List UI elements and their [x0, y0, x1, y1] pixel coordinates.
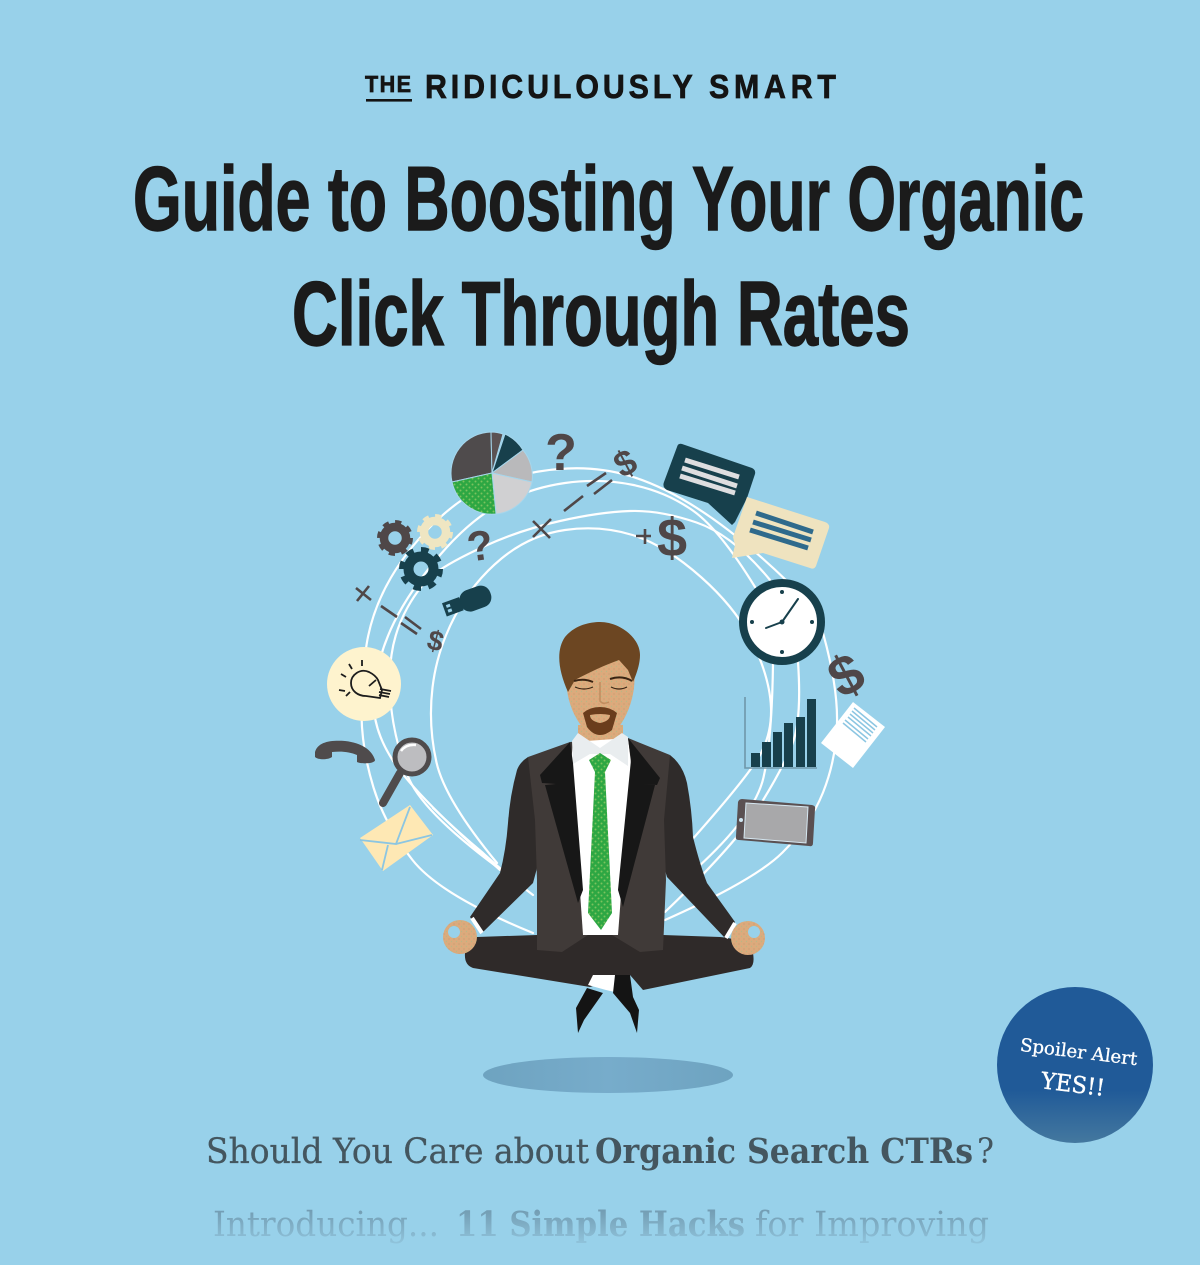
- speech bubble dark: [663, 444, 755, 525]
- collar: [572, 733, 628, 766]
- right lapel: [618, 738, 660, 907]
- fading intro line: [213, 1204, 989, 1245]
- lightbulb icon: [327, 647, 401, 721]
- phone icon: [315, 741, 375, 763]
- right shoe: [613, 975, 639, 1033]
- nose: [600, 682, 609, 703]
- left lapel: [540, 742, 583, 903]
- title: [133, 149, 1084, 365]
- subheading question: ?: [977, 1132, 994, 1172]
- dollar sign right: $: [817, 640, 874, 710]
- shirt: [571, 738, 631, 935]
- pie chart icon: [451, 432, 532, 514]
- jacket body: [528, 738, 670, 952]
- subheading question: Should You Care about: [206, 1132, 589, 1172]
- face: [564, 640, 636, 736]
- spoiler alert badge: Spoiler Alert: [1019, 1035, 1139, 1070]
- meditating man: [443, 622, 765, 1033]
- subheading question: [206, 1131, 994, 1172]
- header eyebrow: [365, 68, 837, 105]
- fading intro line: 11 Simple Hacks: [456, 1204, 745, 1245]
- left arm: [470, 757, 550, 933]
- orbit rings: [361, 468, 837, 933]
- sock: [588, 975, 615, 992]
- fading intro line: Introducing...: [213, 1205, 439, 1245]
- dollar sign small: $: [424, 624, 447, 658]
- math symbols left: [356, 586, 421, 634]
- closed eyes: [575, 687, 627, 689]
- dollar sign large: $: [657, 508, 687, 568]
- neck: [578, 725, 623, 748]
- document icon: [821, 702, 885, 768]
- spoiler alert badge: YES!!: [1039, 1068, 1106, 1102]
- tablet icon: [736, 799, 815, 846]
- bar chart icon: [745, 697, 817, 768]
- hair: [559, 622, 640, 692]
- title: Click Through Rates: [292, 264, 910, 365]
- header eyebrow: RIDICULOUSLY: [425, 68, 693, 105]
- goatee: [583, 707, 617, 735]
- gear dark grey: [380, 522, 410, 554]
- header eyebrow: THE: [365, 71, 411, 97]
- left hand: [443, 920, 477, 954]
- header eyebrow: SMART: [709, 68, 837, 105]
- usb drive icon: [441, 583, 494, 620]
- left shoe: [576, 988, 603, 1033]
- gear cream: [420, 516, 450, 548]
- right arm: [650, 755, 735, 938]
- math symbols top: [533, 473, 651, 544]
- left cuff: [472, 918, 482, 933]
- question mark left: ?: [464, 521, 496, 571]
- right cuff: [726, 923, 735, 938]
- right hand: [731, 921, 765, 955]
- crossed legs: [465, 935, 754, 990]
- gear teal: [402, 550, 440, 588]
- figure shadow: [483, 1057, 733, 1093]
- spoiler alert badge: [997, 987, 1153, 1143]
- eyebrow: [574, 677, 632, 682]
- question mark top: ?: [545, 424, 577, 482]
- speech bubble cream: [732, 497, 829, 569]
- tie: [588, 753, 612, 930]
- envelope icon: [360, 805, 433, 871]
- dollar sign top: $: [607, 440, 644, 486]
- subheading question: Organic Search CTRs: [595, 1131, 973, 1172]
- magnifier icon: [383, 740, 429, 803]
- fading intro line: for Improving: [755, 1205, 989, 1245]
- clock icon: [743, 583, 821, 661]
